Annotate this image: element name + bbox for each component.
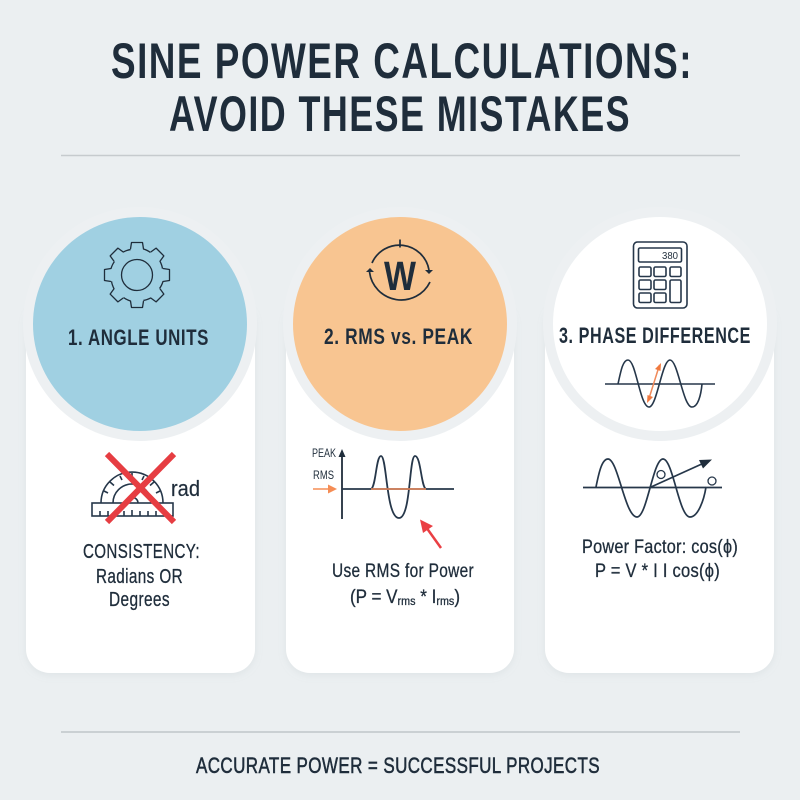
icon: gear — [104, 242, 170, 308]
text: consistency: Degrees — [109, 589, 170, 611]
chart: rms vs peak waveform: RMS — [313, 470, 334, 482]
footer takeaway: ACCURATE POWER = SUCCESSFUL PROJECTS — [196, 753, 600, 778]
text: use rms for power: Use RMS for Power — [332, 561, 474, 582]
chart: power factor waveform — [583, 459, 722, 517]
text: consistency: Radians OR — [96, 566, 183, 588]
circle header: phase difference — [553, 217, 767, 431]
text: power factor: Power Factor: cos(ϕ) — [582, 537, 738, 558]
circle header: rms vs peak — [293, 217, 507, 431]
text: use rms for power: rms — [398, 594, 416, 608]
arrow: red pointer — [420, 520, 441, 548]
title — [111, 33, 693, 142]
icon: calculator — [634, 242, 687, 308]
text: power factor — [582, 537, 738, 582]
text: consistency: CONSISTENCY: — [83, 541, 200, 563]
panel: angle units — [23, 207, 257, 673]
icon: watt cycle: W — [384, 253, 416, 299]
text: use rms for power: ) — [454, 587, 460, 608]
chart: rms vs peak waveform: PEAK — [312, 448, 336, 460]
icon: watt cycle — [366, 240, 433, 300]
text: use rms for power — [332, 561, 474, 608]
chart: phase waveform — [605, 360, 715, 407]
text: consistency — [83, 541, 200, 611]
icon: crossed-out protractor — [92, 454, 174, 522]
text: power factor: P = V * I I cos(ϕ) — [595, 561, 720, 582]
text: use rms for power: (P = V — [350, 587, 403, 608]
panel: phase difference — [543, 207, 777, 673]
heading: rms vs peak: 2. RMS vs. PEAK — [324, 324, 473, 349]
chart: rms vs peak waveform — [312, 448, 454, 519]
title: AVOID THESE MISTAKES — [169, 86, 631, 142]
panel: rms vs peak — [283, 207, 517, 673]
icon: calculator: 380 — [662, 251, 678, 262]
text: use rms for power: * I — [416, 587, 436, 608]
circle header: angle units — [33, 217, 247, 431]
label: rad: rad — [171, 476, 200, 501]
heading: angle units: 1. ANGLE UNITS — [68, 325, 209, 350]
text: use rms for power: rms — [436, 594, 454, 608]
